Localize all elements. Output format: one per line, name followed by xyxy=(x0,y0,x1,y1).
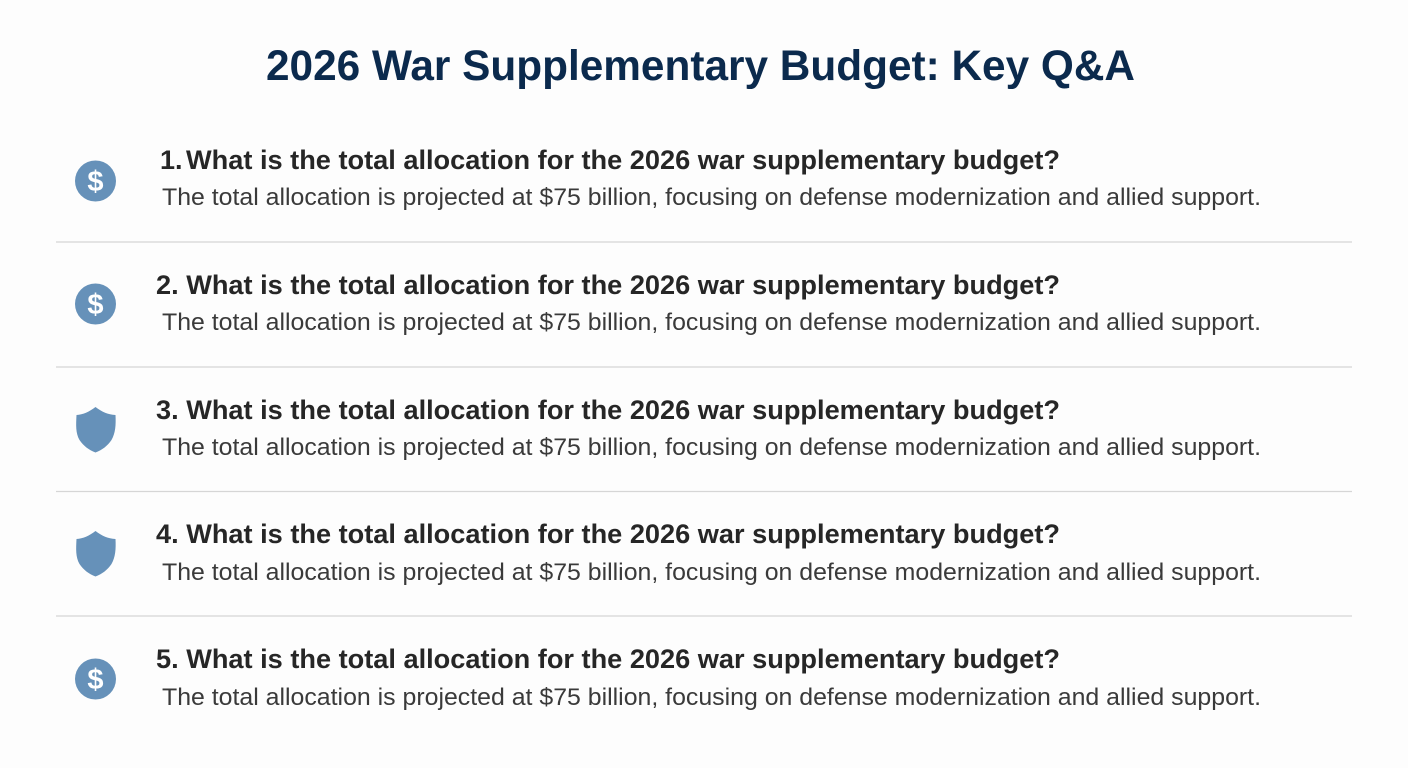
panel: question 5 xyxy=(75,644,1261,711)
icon: dollar coin 2 xyxy=(75,284,116,324)
icon: shield 4 xyxy=(76,531,116,576)
icon: dollar coin 1 xyxy=(75,160,116,202)
question 5 text: 5. What is the total allocation for the 2026 war supplementary budget? xyxy=(156,644,1060,674)
question 1 text: What is the total allocation for the 2026 war supplementary budget? xyxy=(186,145,1060,175)
panel: question 4 xyxy=(76,519,1261,586)
question 3 text: 3. What is the total allocation for the 2026 war supplementary budget? xyxy=(156,395,1060,425)
panel: question 3 xyxy=(76,395,1261,461)
answer 4 text: The total allocation is projected at $75 billion, focusing on defense modernization and allied support. xyxy=(162,559,1261,586)
answer 1 text: The total allocation is projected at $75 billion, focusing on defense modernization and allied support. xyxy=(162,184,1261,211)
answer 5 text: The total allocation is projected at $75 billion, focusing on defense modernization and allied support. xyxy=(162,684,1261,711)
question 4 text: 4. What is the total allocation for the 2026 war supplementary budget? xyxy=(156,519,1060,549)
icon: shield 3 xyxy=(76,407,116,452)
question 1 text: 1. xyxy=(160,145,183,175)
question 2 text: 2. What is the total allocation for the 2026 war supplementary budget? xyxy=(156,270,1060,300)
panel: question 1 xyxy=(75,145,1261,211)
icon: dollar coin 5 xyxy=(75,658,116,700)
icon: dollar coin 5: $ xyxy=(87,664,104,696)
panel: question 2 xyxy=(75,270,1261,336)
title: 2026 War Supplementary Budget: Key Q&A xyxy=(266,42,1135,90)
icon: dollar coin 1: $ xyxy=(87,166,104,198)
answer 2 text: The total allocation is projected at $75 billion, focusing on defense modernization and allied support. xyxy=(162,309,1261,336)
icon: dollar coin 2: $ xyxy=(87,289,104,321)
answer 3 text: The total allocation is projected at $75 billion, focusing on defense modernization and allied support. xyxy=(162,434,1261,461)
